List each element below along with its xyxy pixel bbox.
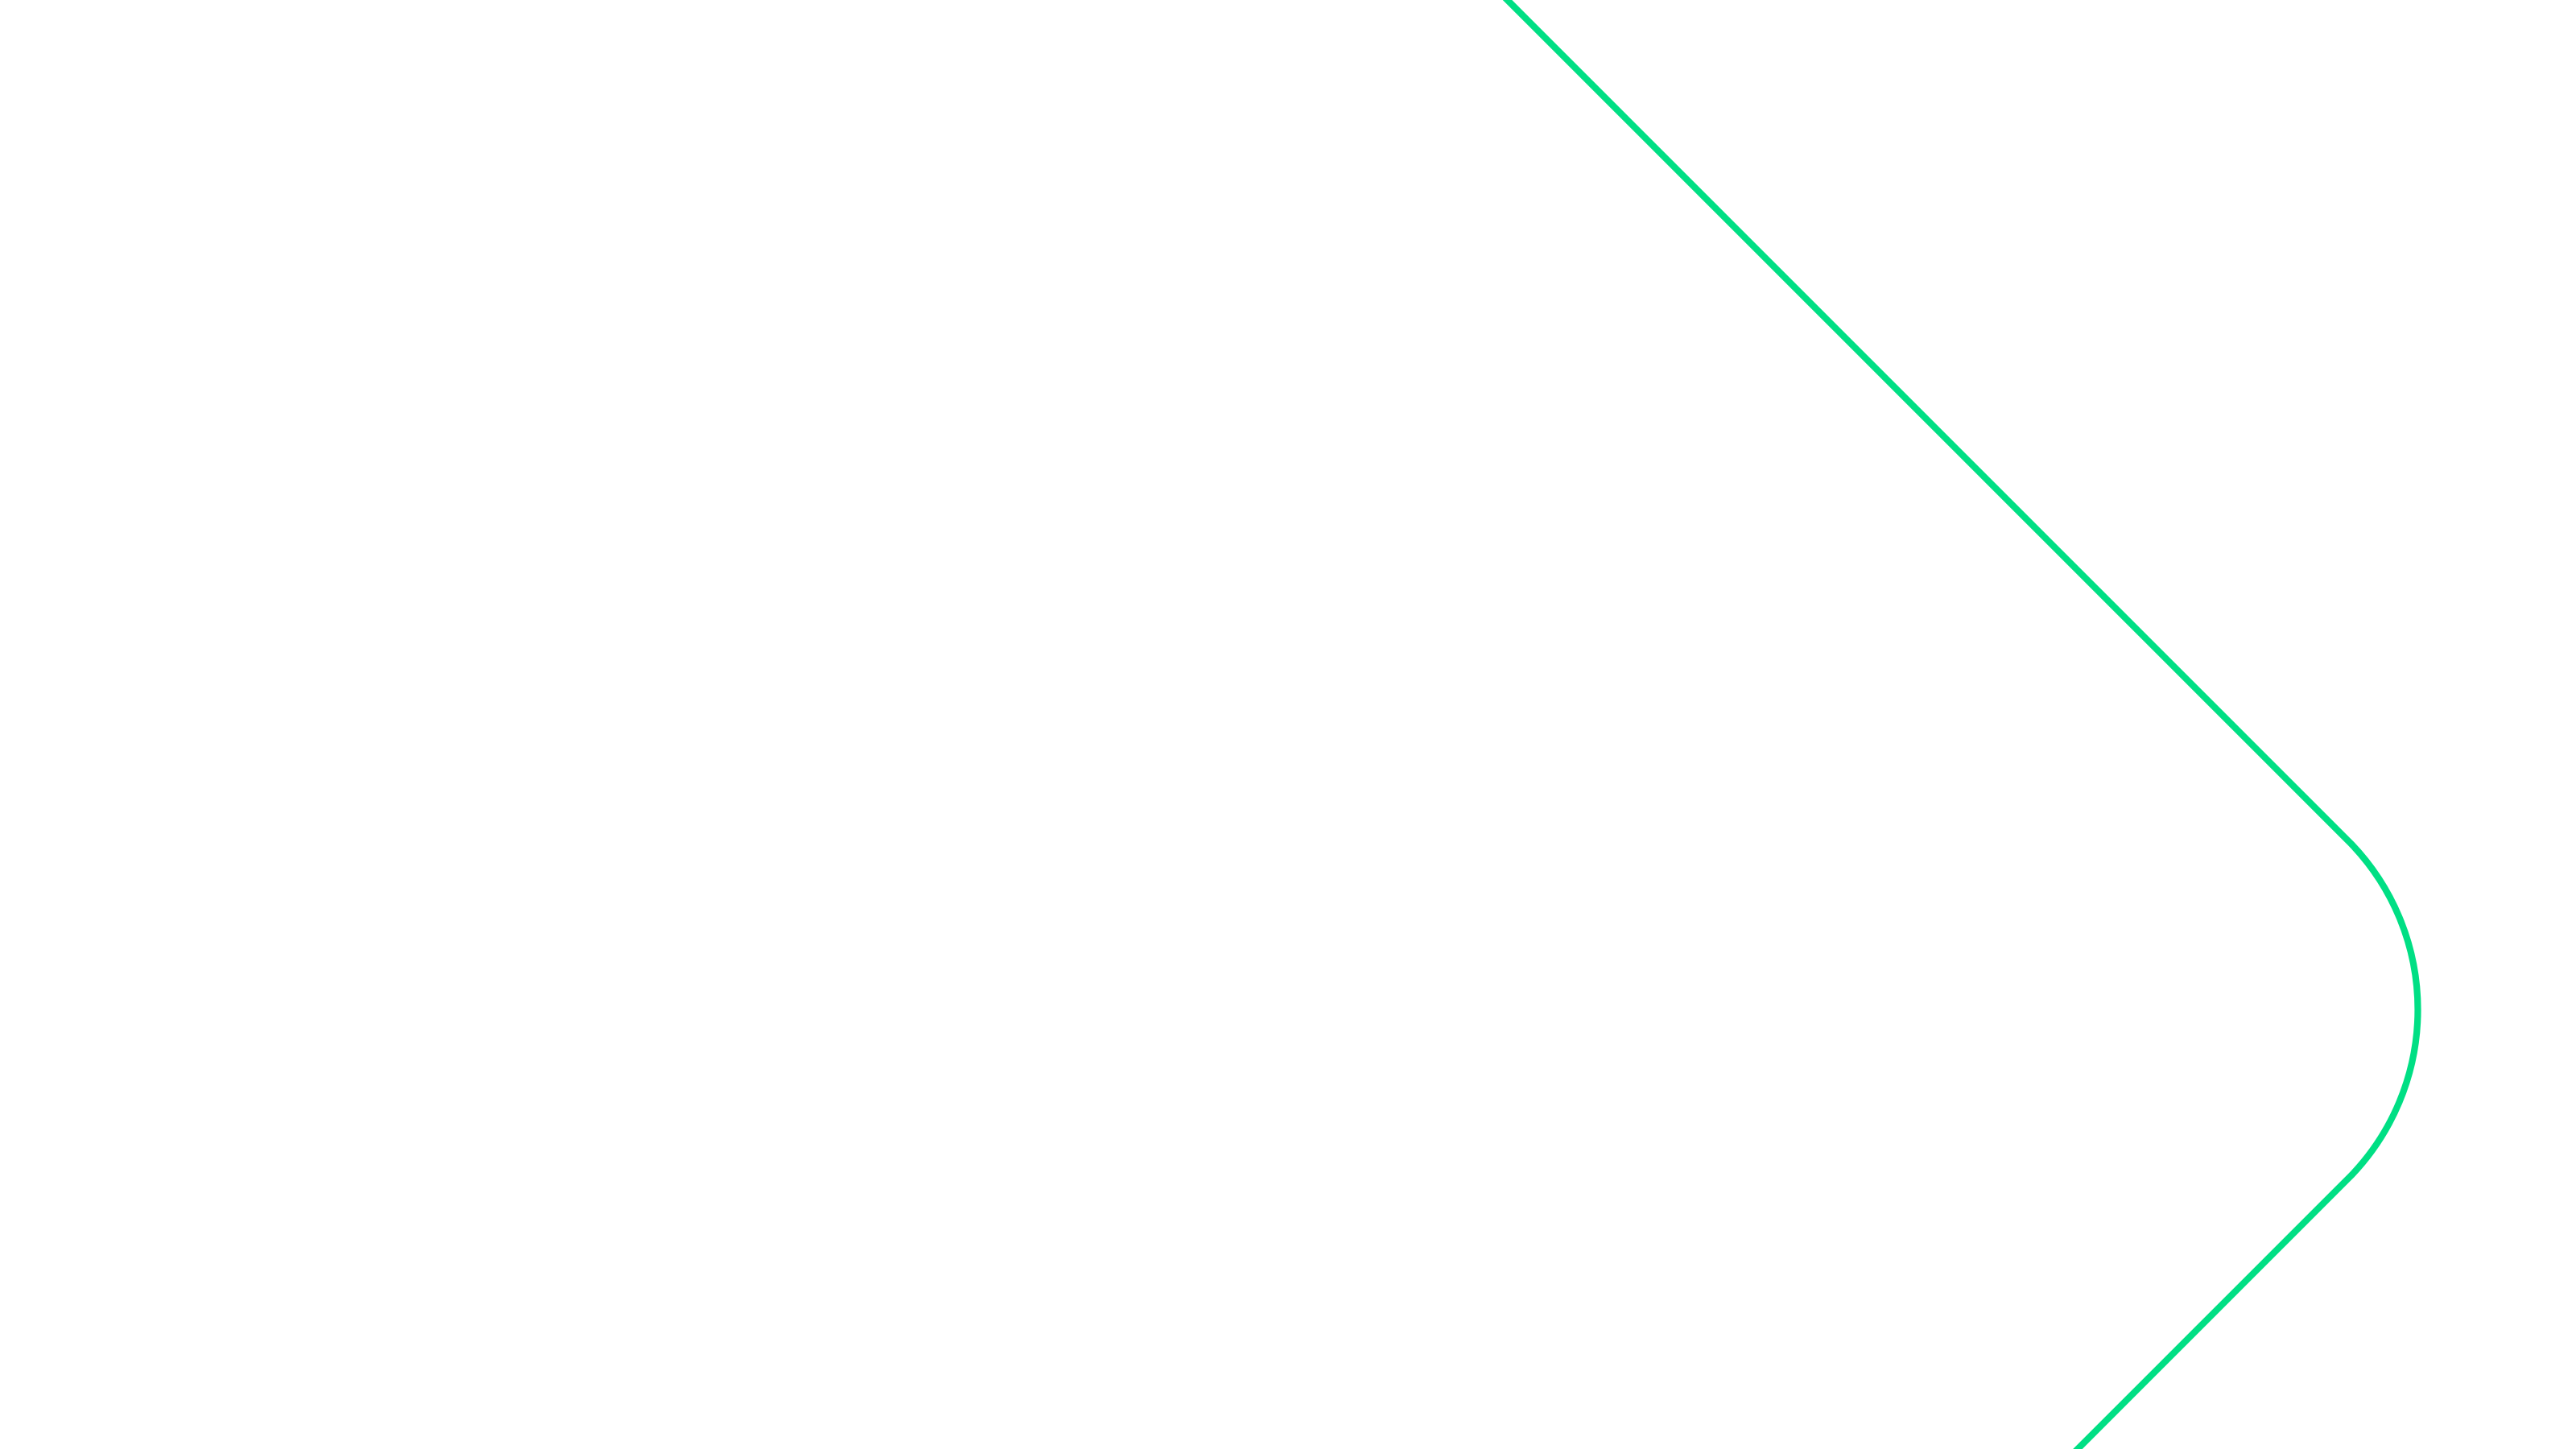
shape: green rounded arrow outline	[1499, 0, 2418, 1449]
